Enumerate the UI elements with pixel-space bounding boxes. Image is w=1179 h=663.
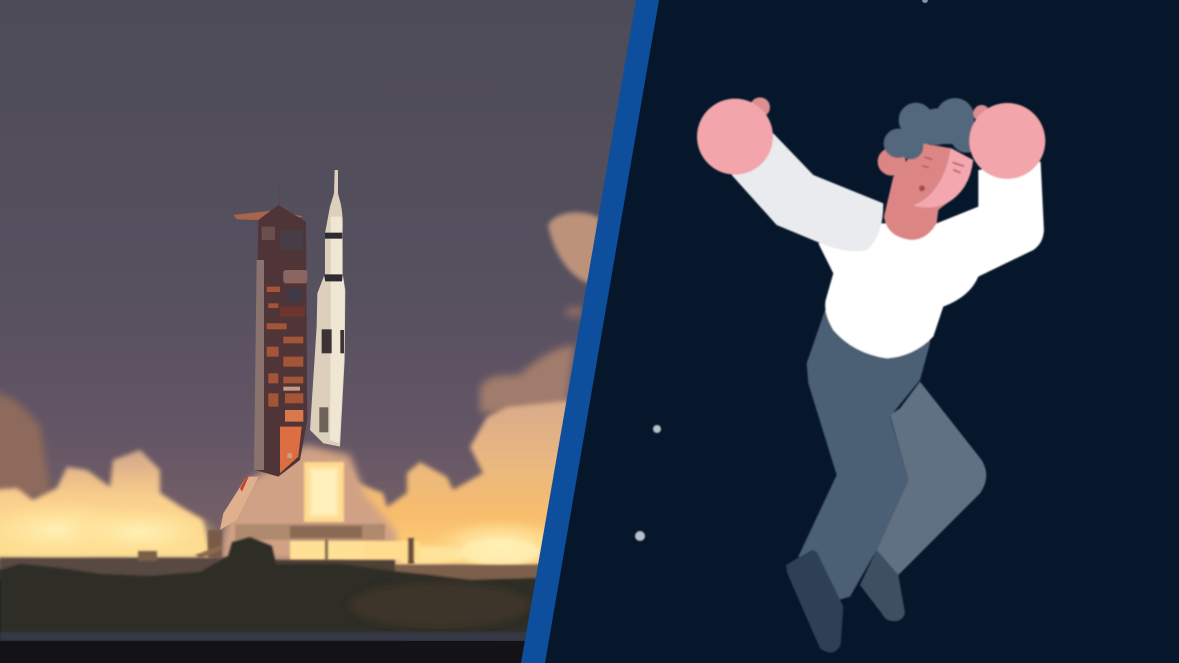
left arm sleeve (732, 133, 883, 251)
launch tower (220, 180, 307, 530)
right hand (969, 103, 1045, 179)
stars (635, 0, 928, 541)
legs and feet (786, 310, 986, 653)
panel: rocket launch photo (0, 0, 640, 663)
back foot (860, 550, 905, 621)
hair (884, 98, 983, 159)
upper body (697, 97, 1045, 358)
foreground bottom edge (0, 641, 530, 663)
left hand (697, 99, 773, 175)
Saturn V rocket (310, 170, 345, 447)
face highlight (913, 148, 973, 208)
foreground railing (0, 632, 530, 641)
left thumb (750, 97, 770, 117)
sky (0, 0, 640, 570)
mouth (919, 185, 925, 191)
launch platform (195, 524, 420, 564)
blue diagonal divider (521, 0, 659, 663)
head and neck (884, 143, 973, 240)
front leg (798, 310, 930, 600)
tree line (0, 537, 540, 641)
ear (878, 148, 906, 176)
facial features (923, 157, 963, 173)
ground strip (0, 551, 540, 585)
white torso and right arm (818, 162, 1044, 358)
back leg (877, 382, 986, 575)
engine flame (304, 462, 344, 522)
front foot (786, 550, 843, 653)
illustration: floating person (697, 97, 1045, 653)
smoke clouds (0, 212, 600, 571)
right thumb (973, 105, 990, 122)
